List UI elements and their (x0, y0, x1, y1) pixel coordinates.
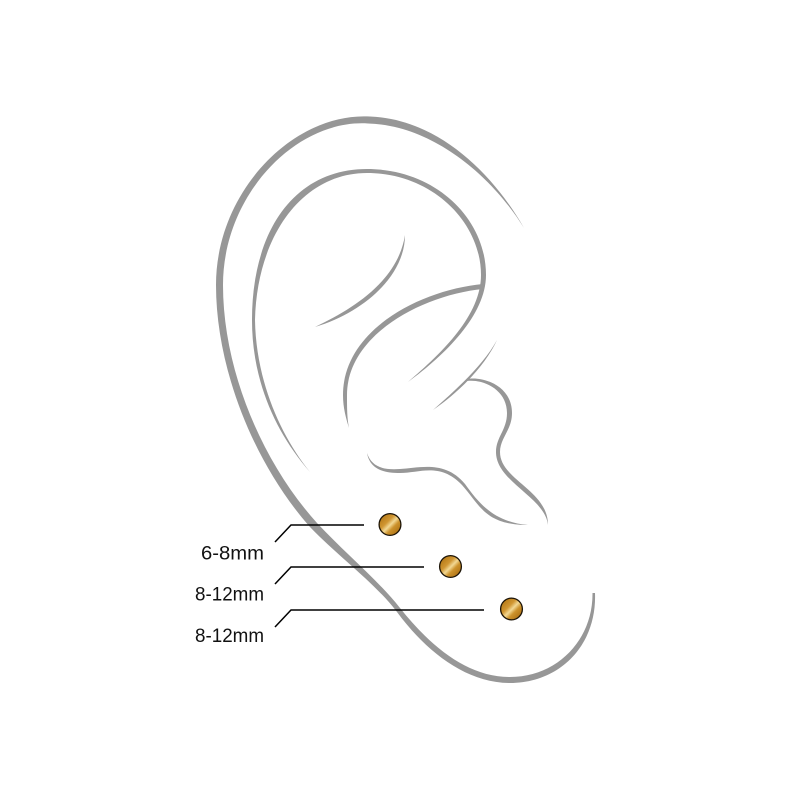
gold stud 2 (440, 556, 461, 577)
lobe crease (367, 453, 528, 525)
tragus line (433, 340, 497, 410)
leader line: 6-8mm (275, 525, 364, 542)
label: lower 8-12mm: 8-12mm (195, 626, 264, 647)
antihelix fold (343, 284, 483, 428)
gold stud 3 (501, 598, 522, 620)
gold stud 1 (379, 514, 401, 535)
label: 6-8mm: 6-8mm (201, 544, 264, 564)
leader line: upper 8-12mm (275, 567, 424, 584)
label: upper 8-12mm: 8-12mm (195, 584, 264, 606)
ear outline: outer helix and lobe (216, 116, 595, 683)
inner helix fold (252, 169, 486, 472)
upper crease (315, 235, 405, 327)
leader line: lower 8-12mm (275, 610, 484, 627)
tragus and antitragus curve (467, 378, 548, 525)
